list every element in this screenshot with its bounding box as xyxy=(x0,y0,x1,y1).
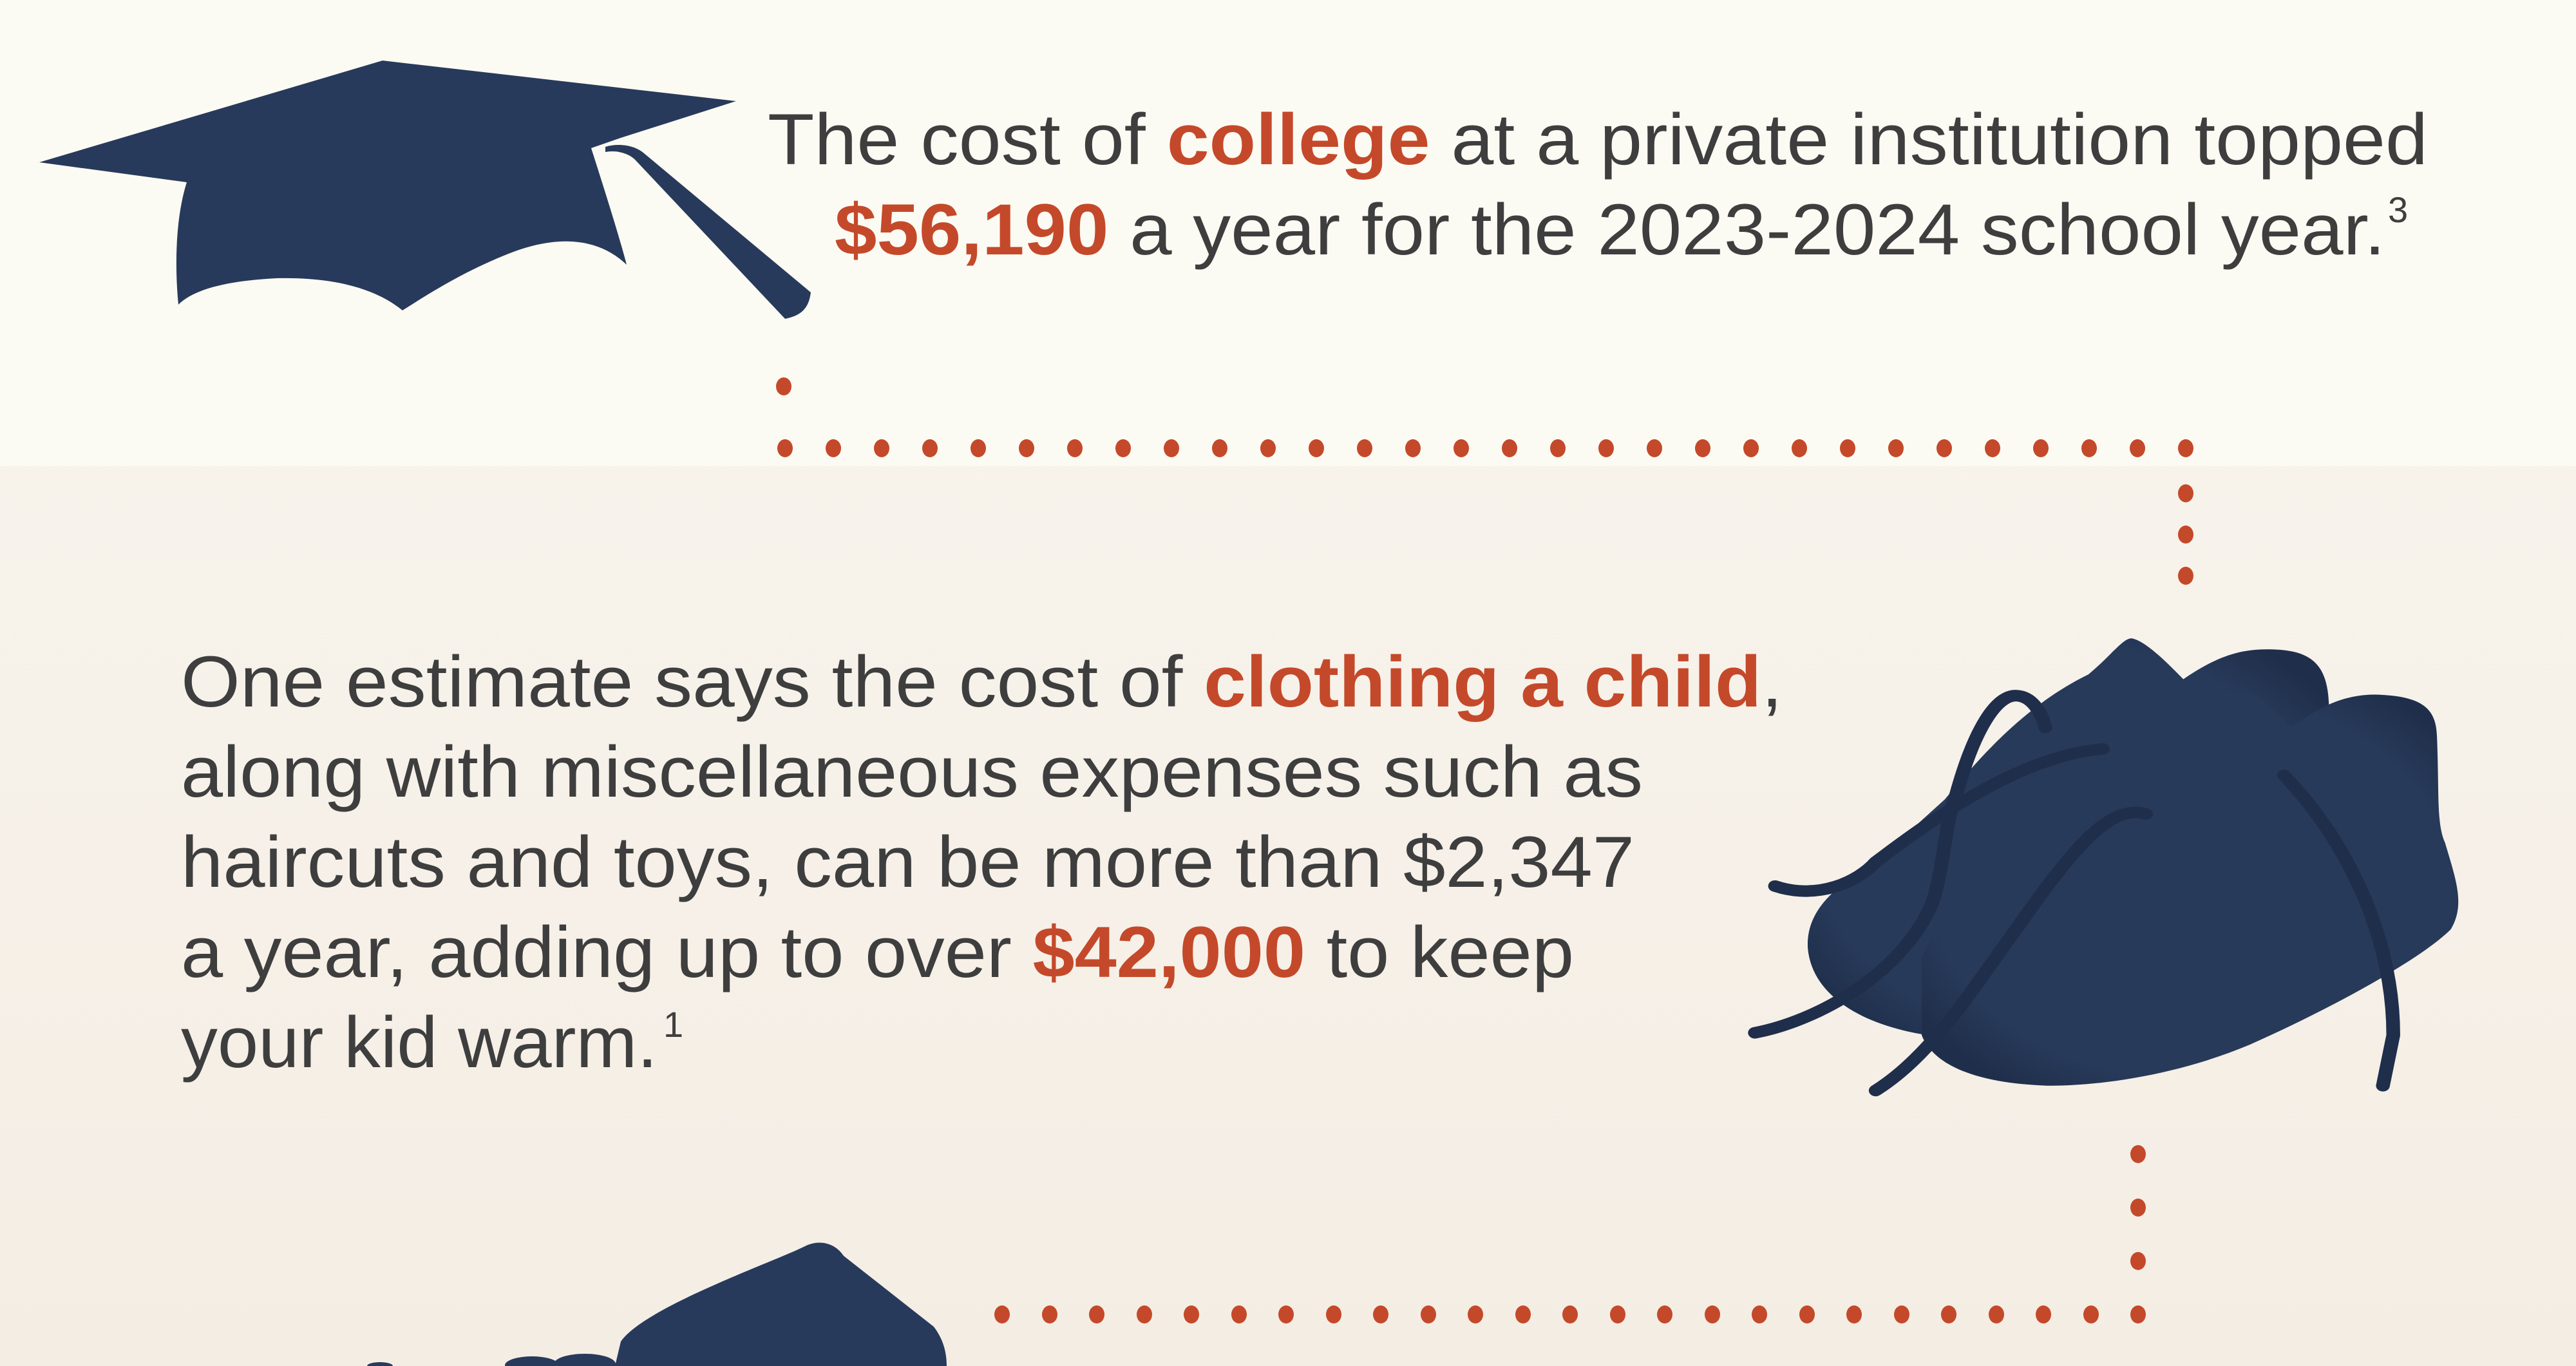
dotted connector: clothing to next item xyxy=(994,1145,2146,1323)
text block: clothing cost: along with miscellaneous expenses such as xyxy=(181,732,1643,812)
text block: clothing cost: 1 xyxy=(663,1004,683,1045)
text block: college cost: The cost of college at a private institution topped xyxy=(768,99,2428,180)
text block: clothing cost: haircuts and toys, can be more than $2,347 xyxy=(181,822,1634,902)
text block: college cost: $56,190 a year for the 2023-2024 school year. xyxy=(835,189,2385,270)
dotted connector: college to clothing xyxy=(776,377,2193,585)
icon: graduation cap xyxy=(39,61,811,319)
text block: clothing cost: a year, adding up to over $42,000 to keep xyxy=(181,912,1574,992)
text block: clothing cost: One estimate says the cost of clothing a child , xyxy=(181,641,1783,722)
icon: baby shoes xyxy=(1755,638,2458,1090)
text block: college cost xyxy=(768,99,2428,270)
text block: clothing cost: your kid warm. xyxy=(181,1002,658,1083)
text block: college cost: 3 xyxy=(2388,189,2408,230)
text block: clothing cost xyxy=(181,641,1783,1083)
icon: partial bottom item xyxy=(367,1243,947,1366)
